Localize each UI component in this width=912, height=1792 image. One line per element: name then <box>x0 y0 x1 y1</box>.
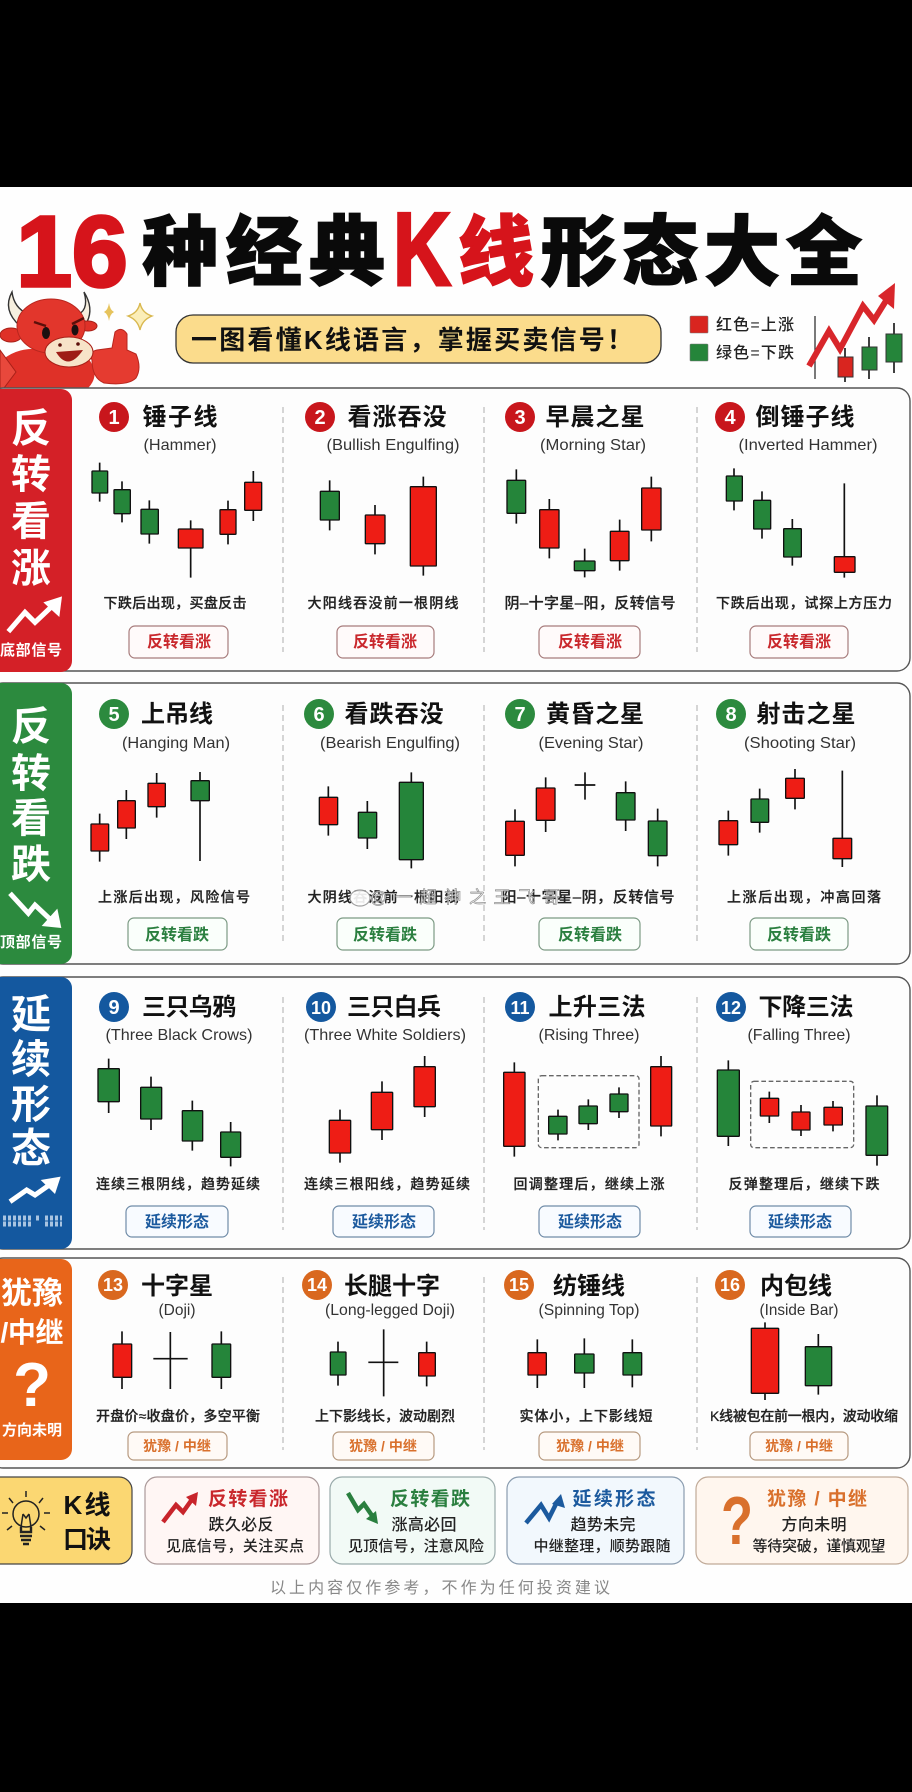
pattern 11: rising three: 延续形态 <box>558 1212 622 1231</box>
side tab: reversal bearish: 看 <box>11 797 51 841</box>
title: 种经典 <box>142 211 385 296</box>
pattern 15: spinning top: 犹豫 / 中继 <box>556 1438 624 1454</box>
pattern 2: bullish engulfing: 2 <box>314 407 326 429</box>
pattern 15: spinning top: 纺锤线 <box>553 1273 625 1300</box>
pattern 16: inside bar: 16 <box>720 1275 740 1295</box>
card: reversal bearish rule: 涨高必回 <box>392 1516 456 1534</box>
pattern 13: doji: 开盘价≈收盘价，多空平衡 <box>96 1408 260 1424</box>
side tab: continuation: 形 <box>11 1083 51 1127</box>
pattern 6: bearish engulfing: 看跌吞没 <box>344 701 444 728</box>
pattern 13: doji: 13 <box>103 1275 123 1295</box>
legend: colour key: 红色=上涨 <box>716 316 794 334</box>
pattern 13: doji: (Doji) <box>158 1302 196 1319</box>
side tab: reversal bearish: 转 <box>11 752 51 796</box>
pattern 5: hanging man: 5 <box>108 704 120 726</box>
pattern 5: hanging man: 上涨后出现，风险信号 <box>98 889 250 905</box>
pattern 5: hanging man: (Hanging Man) <box>122 735 230 752</box>
side tab: reversal bullish: 看 <box>11 500 51 544</box>
pattern 15: spinning top <box>504 1270 652 1460</box>
pattern 8: shooting star: (Shooting Star) <box>744 735 856 752</box>
pattern 10: three white soldiers: 10 <box>311 998 331 1018</box>
pattern 12: falling three <box>716 992 888 1237</box>
pattern 11: rising three: 11 <box>510 998 530 1018</box>
pattern 9: three black crows: (Three Black Crows) <box>106 1027 252 1044</box>
legend: colour key: 绿色=下跌 <box>716 344 794 362</box>
pattern 3: morning star: 3 <box>514 407 526 429</box>
pattern 7: evening star: 阳–十字星–阴，反转信号 <box>502 888 674 906</box>
card: reversal bearish rule: 反转看跌 <box>390 1488 470 1510</box>
side tab: reversal bearish: 跌 <box>11 843 51 887</box>
pattern 3: morning star <box>504 402 676 658</box>
pattern 11: rising three: (Rising Three) <box>538 1027 640 1044</box>
pattern 8: shooting star: 8 <box>725 704 737 726</box>
pattern 15: spinning top: 实体小，上下影线短 <box>520 1408 652 1424</box>
side tab: indecision: /中继 <box>0 1317 64 1348</box>
pattern 7: evening star <box>502 699 674 950</box>
disclaimer: 以上内容仅作参考，不作为任何投资建议 <box>270 1579 610 1597</box>
card: K-line mnemonic <box>0 1477 132 1564</box>
pattern 12: falling three: 下降三法 <box>758 994 854 1021</box>
pattern 3: morning star: 阴–十字星–阳，反转信号 <box>504 594 676 612</box>
card: continuation rule <box>507 1477 684 1564</box>
side tab: continuation <box>0 977 72 1249</box>
icon: blue zigzag <box>526 1494 565 1523</box>
pattern 16: inside bar: (Inside Bar) <box>760 1302 838 1319</box>
pattern 12: falling three: (Falling Three) <box>748 1027 850 1044</box>
icon: sparkles <box>104 303 152 330</box>
pattern 4: inverted hammer: 下跌后出现，试探上方压力 <box>716 595 892 611</box>
title: 线 <box>458 211 534 296</box>
card: reversal bullish rule: 见底信号，关注买点 <box>166 1537 304 1555</box>
pattern 5: hanging man: 上吊线 <box>141 701 213 728</box>
pattern 13: doji: 犹豫 / 中继 <box>143 1438 211 1454</box>
pattern 3: morning star: 反转看涨 <box>558 633 622 651</box>
pattern 15: spinning top: 15 <box>509 1275 529 1295</box>
pattern 12: falling three: 反弹整理后，继续下跌 <box>728 1176 880 1192</box>
title: 形态大全 <box>541 211 862 296</box>
side tab: continuation: 延 <box>11 993 51 1037</box>
pattern 11: rising three <box>504 992 672 1237</box>
pattern 1: hammer: 锤子线 <box>142 404 218 431</box>
pattern 5: hanging man: 反转看跌 <box>145 926 209 944</box>
pattern 8: shooting star: 上涨后出现，冲高回落 <box>727 889 881 905</box>
pattern 3: morning star: (Morning Star) <box>540 437 646 454</box>
side tab: reversal bullish: 底部信号 <box>0 641 62 659</box>
card: reversal bullish rule: 反转看涨 <box>208 1488 288 1510</box>
pattern 9: three black crows: 延续形态 <box>145 1212 209 1231</box>
pattern 14: long-legged doji: 14 <box>307 1275 327 1295</box>
card: reversal bullish rule <box>145 1477 319 1564</box>
card: indecision rule <box>696 1477 908 1564</box>
panel: indecision / relay <box>0 1258 910 1468</box>
pattern 16: inside bar <box>710 1270 898 1460</box>
pattern 10: three white soldiers: 连续三根阳线，趋势延续 <box>304 1176 470 1192</box>
side tab: continuation: 态 <box>11 1127 51 1171</box>
mascot: red bull <box>0 292 139 390</box>
pattern 15: spinning top: (Spinning Top) <box>538 1302 640 1319</box>
pattern 10: three white soldiers: 延续形态 <box>352 1212 416 1231</box>
pattern 10: three white soldiers: (Three White Soldiers) <box>304 1027 466 1044</box>
card: reversal bearish rule: 见顶信号，注意风险 <box>348 1537 484 1555</box>
pattern 13: doji <box>96 1270 260 1460</box>
pattern 7: evening star: (Evening Star) <box>538 735 644 752</box>
side tab: reversal bullish: 转 <box>11 453 51 497</box>
pattern 9: three black crows: 9 <box>108 997 120 1019</box>
pattern 11: rising three: 上升三法 <box>548 994 646 1021</box>
pattern 12: falling three: 12 <box>721 998 741 1018</box>
pattern 7: evening star: 7 <box>514 704 526 726</box>
pattern 6: bearish engulfing: 反转看跌 <box>353 926 417 944</box>
icon: orange question mark: ? <box>721 1483 753 1559</box>
pattern 2: bullish engulfing: 大阳线吞没前一根阴线 <box>308 595 458 611</box>
pattern 2: bullish engulfing <box>305 402 460 658</box>
pattern 14: long-legged doji: 长腿十字 <box>344 1273 440 1300</box>
card: indecision rule: 犹豫 / 中继 <box>767 1487 867 1510</box>
pattern 3: morning star: 早晨之星 <box>546 403 644 431</box>
pattern 9: three black crows: 连续三根阴线，趋势延续 <box>96 1176 260 1192</box>
panel: reversal bullish <box>0 388 910 672</box>
side tab: reversal bullish <box>0 389 72 672</box>
pattern 4: inverted hammer <box>715 402 892 658</box>
card: K-line mnemonic: 口诀 <box>63 1526 111 1554</box>
panel: continuation <box>0 977 910 1249</box>
watermark: @一超神之王飞哥 <box>370 888 560 907</box>
pattern 7: evening star: 黄昏之星 <box>546 700 644 728</box>
pattern 6: bearish engulfing: 大阴线吞没前一根阳线 <box>308 889 458 905</box>
card: continuation rule: 趋势未完 <box>570 1515 636 1534</box>
pattern 8: shooting star: 射击之星 <box>756 700 856 728</box>
pattern 13: doji: 十字星 <box>141 1273 213 1300</box>
pattern 10: three white soldiers: 三只白兵 <box>347 994 441 1021</box>
side tab: indecision: 方向未明 <box>2 1421 62 1439</box>
pattern 4: inverted hammer: (Inverted Hammer) <box>738 437 878 454</box>
icon: green down arrow <box>348 1493 378 1524</box>
pattern 10: three white soldiers <box>304 992 470 1237</box>
side tab: reversal bearish <box>0 683 72 964</box>
title <box>16 192 862 308</box>
pattern 1: hammer <box>92 402 262 658</box>
pattern 1: hammer: (Hammer) <box>144 437 216 454</box>
title: K <box>393 192 451 308</box>
panel: reversal bearish <box>0 683 910 964</box>
pattern 8: shooting star: 反转看跌 <box>767 926 831 944</box>
icon: light bulb <box>2 1491 50 1544</box>
pattern 16: inside bar: 内包线 <box>760 1273 832 1300</box>
pattern 16: inside bar: 犹豫 / 中继 <box>765 1438 833 1454</box>
side tab: indecision: ? <box>13 1351 51 1420</box>
pattern 4: inverted hammer: 4 <box>724 407 736 429</box>
pattern 5: hanging man <box>91 699 250 950</box>
pattern 14: long-legged doji <box>302 1270 455 1460</box>
card: continuation rule: 中继整理，顺势跟随 <box>534 1538 670 1555</box>
card: indecision rule: 方向未明 <box>782 1515 846 1534</box>
pattern 1: hammer: 下跌后出现，买盘反击 <box>104 595 246 611</box>
pattern 11: rising three: 回调整理后，继续上涨 <box>514 1176 664 1192</box>
subtitle pill <box>176 315 661 363</box>
pattern 6: bearish engulfing <box>304 699 460 950</box>
pattern 14: long-legged doji: 犹豫 / 中继 <box>349 1438 417 1454</box>
card: K-line mnemonic: K线 <box>64 1490 110 1520</box>
title: 16 <box>16 196 128 308</box>
side tab: indecision: 犹豫 <box>1 1276 63 1311</box>
pattern 2: bullish engulfing: 看涨吞没 <box>348 404 446 431</box>
card: reversal bullish rule: 跌久必反 <box>208 1516 274 1534</box>
legend: colour key <box>690 316 794 362</box>
pattern 9: three black crows: 三只乌鸦 <box>142 994 236 1021</box>
pattern 1: hammer: 1 <box>108 407 120 429</box>
pattern 14: long-legged doji: 上下影线长，波动剧烈 <box>315 1408 455 1424</box>
pattern 6: bearish engulfing: (Bearish Engulfing) <box>320 735 460 752</box>
pattern 2: bullish engulfing: (Bullish Engulfing) <box>326 437 460 454</box>
pattern 14: long-legged doji: (Long-legged Doji) <box>325 1302 455 1319</box>
side tab: continuation: 续 <box>11 1038 51 1082</box>
card: indecision rule: 等待突破，谨慎观望 <box>752 1537 886 1555</box>
card: reversal bearish rule <box>330 1477 495 1564</box>
pattern 1: hammer: 反转看涨 <box>147 633 211 651</box>
card: continuation rule: 延续形态 <box>572 1487 656 1510</box>
pattern 8: shooting star <box>716 699 881 950</box>
side tab: reversal bearish: 顶部信号 <box>0 933 62 951</box>
pattern 4: inverted hammer: 反转看涨 <box>767 633 831 651</box>
side tab: reversal bullish: 反 <box>11 407 51 451</box>
pattern 4: inverted hammer: 倒锤子线 <box>756 404 854 431</box>
side tab: indecision <box>0 1259 72 1460</box>
side tab: reversal bullish: 涨 <box>11 547 51 591</box>
pattern 2: bullish engulfing: 反转看涨 <box>353 633 417 651</box>
pattern 16: inside bar: K线被包在前一根内，波动收缩 <box>710 1408 898 1424</box>
side tab: reversal bearish: 反 <box>11 705 51 749</box>
subtitle pill: 一图看懂K线语言，掌握买卖信号！ <box>191 325 633 355</box>
pattern 6: bearish engulfing: 6 <box>313 704 325 726</box>
icon: red up arrow <box>163 1492 198 1522</box>
pattern 7: evening star: 反转看跌 <box>558 926 622 944</box>
pattern 12: falling three: 延续形态 <box>768 1212 832 1231</box>
chart: rising candles with red arrow <box>809 283 902 382</box>
pattern 9: three black crows <box>96 992 260 1237</box>
